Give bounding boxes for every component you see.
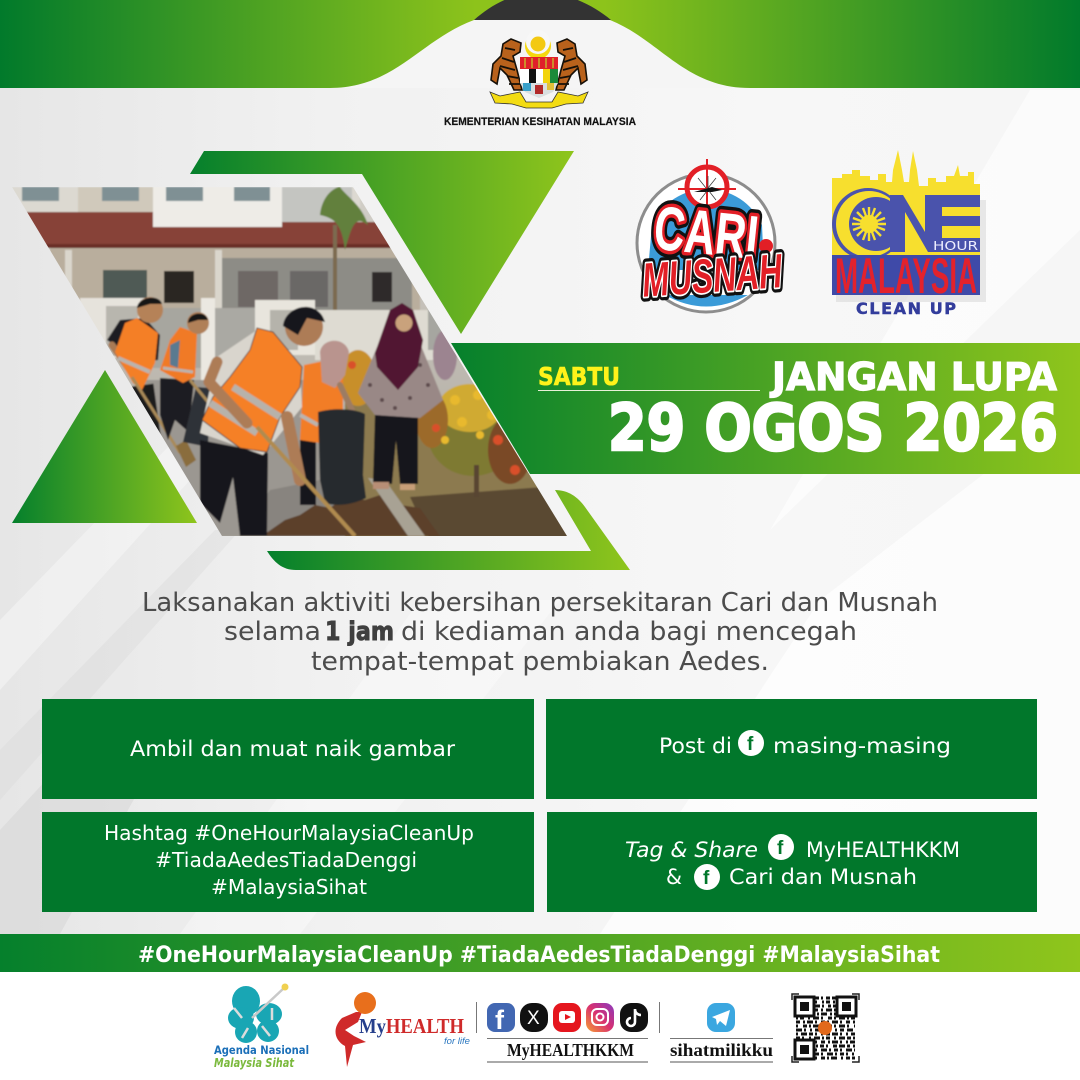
icon: X: X [527, 1008, 540, 1029]
logo: MyHEALTH [336, 992, 470, 1067]
hibiscus stamen [252, 988, 284, 1018]
wordmark line 2: Malaysia Sihat [214, 1055, 295, 1070]
photo: community cleanup [0, 187, 600, 540]
footer [0, 972, 1080, 1080]
lower rule [487, 1061, 648, 1063]
heading: ministry name: KEMENTERIAN KESIHATAN MALAYSIA [444, 116, 636, 128]
person: left worker [107, 297, 196, 467]
icon: telegram [707, 1003, 735, 1032]
person: woman in maroon hijab [358, 303, 443, 490]
green shape: lower corner [267, 490, 630, 570]
instruction paragraph: Laksanakan aktiviti kebersihan persekitaran Cari dan Musnah [142, 588, 938, 618]
divider under SABTU [538, 390, 760, 391]
icon: shield [520, 57, 558, 98]
fence [80, 298, 448, 388]
step box: upload photo: Ambil dan muat naik gambar [130, 737, 455, 762]
step box: tag and share [547, 812, 1037, 912]
step box: upload photo [42, 699, 534, 799]
wordmark: MyHEALTH [359, 1014, 464, 1038]
icon: crescent and sun [525, 30, 551, 59]
hibiscus [228, 986, 282, 1043]
icon: facebook: f [777, 838, 784, 859]
icon: right tiger [556, 39, 587, 90]
person: woman in pink hijab [300, 341, 352, 505]
step box: hashtags: #TiadaAedesTiadaDenggi [155, 848, 417, 872]
lower rule [670, 1061, 773, 1063]
step box: post on facebook: masing-masing [773, 734, 951, 759]
target with mosquito [678, 159, 736, 212]
step box: tag and share: & [666, 865, 682, 890]
ministry crest [444, 30, 636, 128]
badge lower blue [665, 295, 748, 306]
yellow skyline [832, 150, 980, 260]
badge blue sky [648, 189, 764, 270]
wordmark line 1: Agenda Nasional [214, 1043, 309, 1057]
icon: facebook [694, 864, 720, 890]
instruction paragraph: tempat-tempat pembiakan Aedes. [311, 647, 769, 677]
orange ball [354, 992, 376, 1014]
green shape: left triangle [12, 370, 197, 523]
house porch [50, 248, 420, 310]
word CLEAN UP: CLEAN UP [856, 299, 956, 318]
letters NE [890, 195, 980, 252]
upper rule [487, 1038, 648, 1040]
icon: X [520, 1003, 548, 1032]
blue plate with MALAYSIA [832, 255, 980, 295]
star [852, 207, 886, 241]
icon: facebook [487, 1003, 515, 1035]
QR finder top-left [795, 997, 814, 1016]
icon: facebook [738, 730, 764, 756]
instruction paragraph [142, 588, 938, 677]
icon: facebook: f [747, 734, 754, 755]
telegram block [670, 1003, 773, 1063]
wordmark MUSNAH inner outline: MUSNAH [640, 245, 785, 308]
O with crescent and star [832, 188, 904, 260]
house upper storey [0, 187, 360, 227]
step box: hashtags: Hashtag #OneHourMalaysiaCleanUp [104, 821, 474, 845]
top green wave header [0, 0, 1080, 88]
step box: tag and share: Tag & Share [625, 838, 758, 863]
kerb [368, 478, 425, 536]
social icons block [476, 1002, 660, 1063]
wordmark CARI inner outline: CARI [651, 194, 761, 273]
logo: One Hour Malaysia Clean Up [832, 150, 986, 318]
leaf pile [262, 495, 440, 536]
step box: tag and share: Cari dan Musnah [729, 865, 917, 890]
separators [476, 1002, 660, 1033]
garbage bag [318, 409, 366, 505]
icon: TikTok [620, 1003, 648, 1032]
icon: left tiger [491, 39, 522, 90]
handle: MyHEALTHKKM: MyHEALTHKKM [507, 1040, 634, 1060]
hibiscus white figures [234, 1008, 272, 1038]
icon: facebook: f [703, 868, 710, 889]
bush right [348, 330, 532, 497]
rule [670, 1038, 773, 1040]
wordmark MUSNAH: MUSNAH [640, 245, 785, 308]
road [144, 379, 321, 536]
figure [336, 1012, 366, 1067]
icon: YouTube [553, 1003, 581, 1032]
icon: facebook [768, 834, 794, 860]
logo: Cari & Musnah [637, 159, 785, 312]
icon: Instagram [586, 1003, 614, 1032]
bush left [342, 349, 372, 407]
hibiscus pollen [282, 984, 288, 990]
hashtag band [0, 934, 1080, 972]
QR finder top-right [837, 997, 856, 1016]
step box: hashtags: #MalaysiaSihat [211, 875, 367, 899]
green shape: top chevron [190, 151, 574, 334]
icon: facebook: f [495, 1005, 505, 1035]
QR centre logo [818, 1021, 832, 1035]
QR code [792, 994, 859, 1062]
house roof [25, 212, 395, 247]
ampersand badge [759, 239, 773, 253]
logo shadow [836, 200, 986, 302]
step box: post on facebook [546, 699, 1037, 799]
label: SABTU: SABTU [538, 362, 620, 391]
QR finder bottom-left [795, 1040, 814, 1059]
instruction paragraph: 1 jam [325, 617, 394, 647]
instruction paragraph: selama [224, 617, 321, 647]
date banner [451, 343, 1080, 474]
wordmark CARI: CARI [651, 194, 761, 273]
word HOUR: HOUR [933, 239, 978, 253]
instruction paragraph: di kediaman anda bagi mencegah [401, 617, 857, 647]
heading: JANGAN LUPA: JANGAN LUPA [769, 355, 1058, 399]
person: second worker [160, 312, 210, 447]
icon: motto scroll [490, 92, 588, 108]
person: main worker [200, 307, 355, 536]
step box: hashtags [42, 812, 534, 912]
hashtag band: #OneHourMalaysiaCleanUp #TiadaAedesTiadaDenggi #MalaysiaSihat [138, 943, 940, 968]
dark cap on the wave [474, 0, 611, 20]
palm tree [319, 187, 368, 310]
QR data modules [796, 998, 855, 1058]
tagline: for life [444, 1036, 470, 1046]
step box: tag and share: MyHEALTHKKM [806, 838, 960, 863]
grass [344, 402, 538, 536]
step box: post on facebook: Post di [659, 734, 732, 759]
logo: Agenda Nasional Malaysia Sihat [214, 984, 309, 1070]
handle: sihatmilikku: sihatmilikku [670, 1040, 773, 1060]
badge ring [637, 174, 775, 312]
